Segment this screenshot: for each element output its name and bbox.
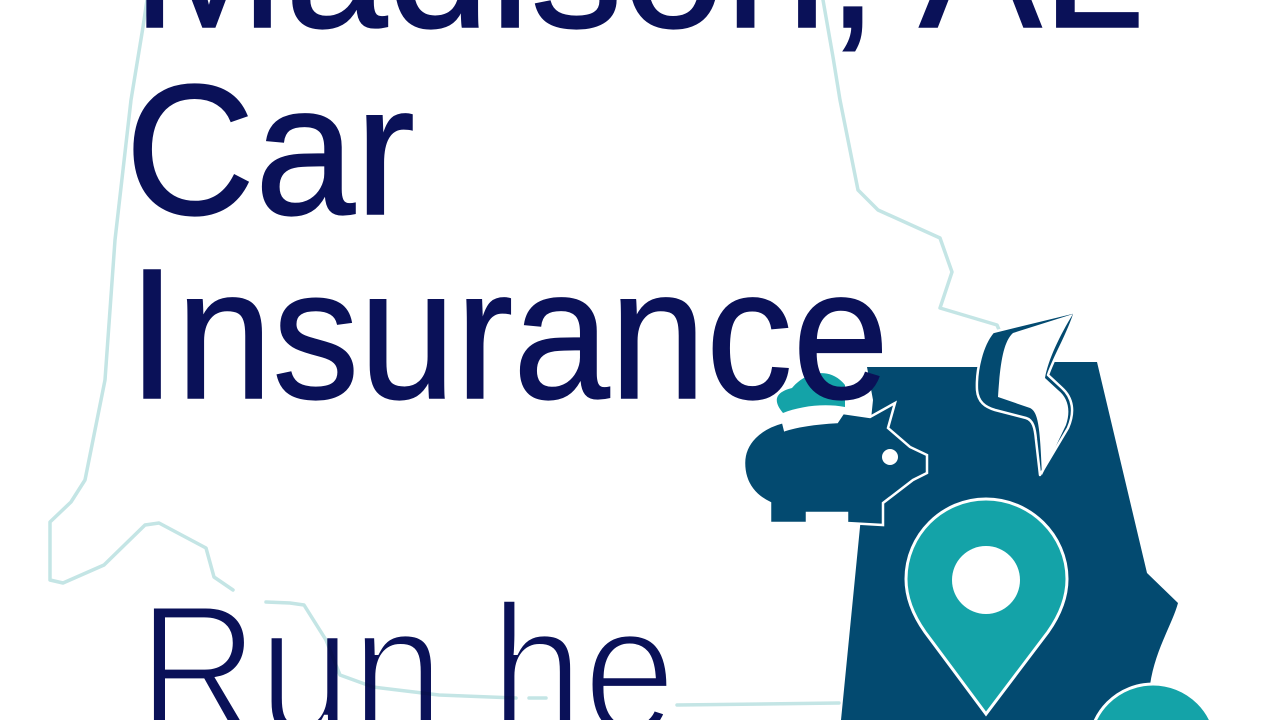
icon: lightning bolt: [977, 312, 1075, 475]
heading: Madison, AL Car Insurance: [125, 0, 1144, 438]
icon: piggy bank: [744, 403, 927, 525]
heading: Madison, AL Car Insurance: Insurance: [128, 231, 889, 438]
faint Alabama state outline: [50, 0, 1035, 705]
icon: location pin: [906, 499, 1067, 714]
icon: teal circle cut off at bottom: [1089, 684, 1217, 720]
heading: Madison, AL Car Insurance: Car: [125, 47, 415, 254]
dark blue Alabama state silhouette: [841, 362, 1178, 720]
coin above piggy bank: [777, 373, 845, 413]
